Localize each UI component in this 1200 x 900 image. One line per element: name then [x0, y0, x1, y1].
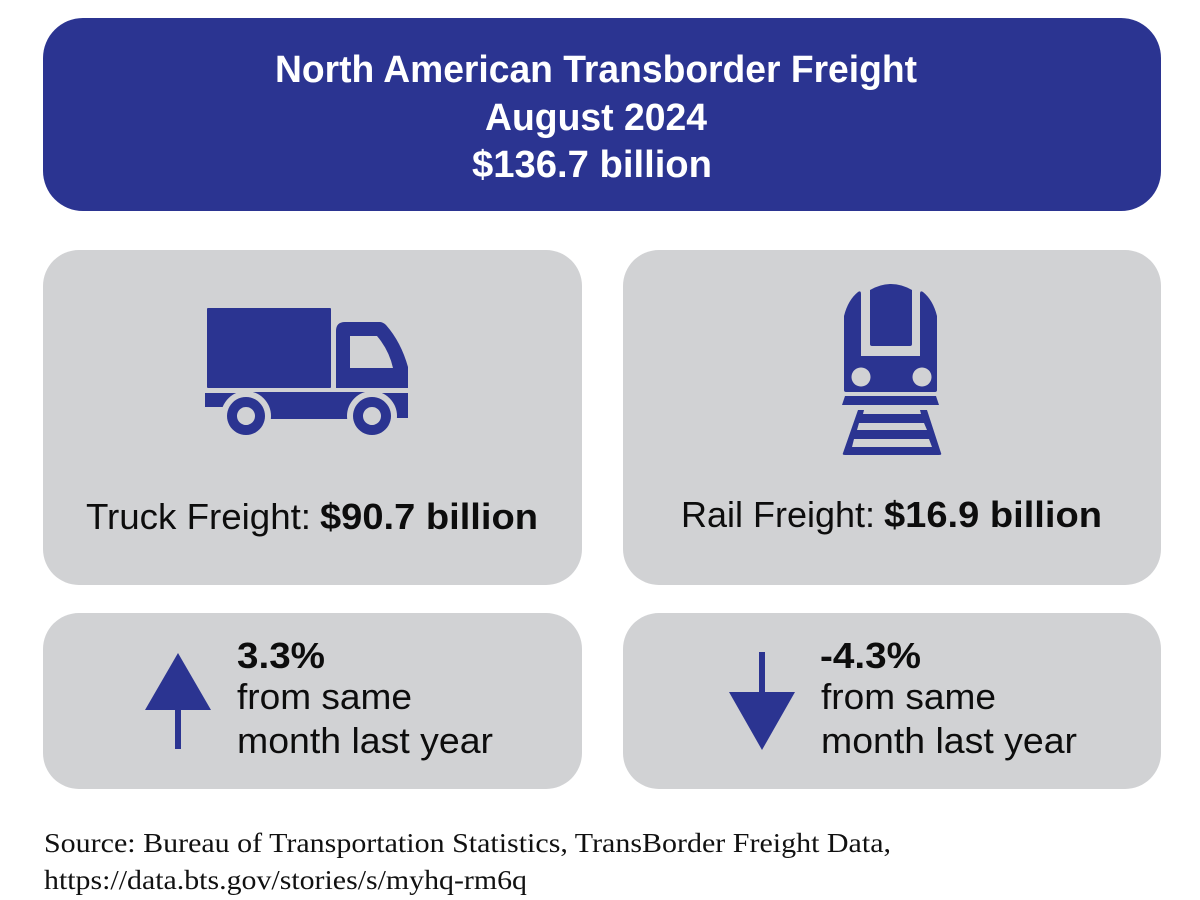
source note: https://data.bts.gov/stories/s/myhq-rm6q [44, 865, 528, 895]
title text [275, 49, 917, 186]
truck freight value: $90.7 billion [320, 496, 538, 537]
rail freight value [681, 494, 1102, 535]
title banner [43, 18, 1161, 211]
truck change text [237, 635, 493, 761]
title text: August 2024 [485, 97, 707, 139]
rail freight value: $16.9 billion [884, 494, 1102, 535]
truck change text: month last year [237, 720, 493, 761]
title text: North American Transborder Freight [275, 49, 917, 91]
panel: truck change [43, 613, 582, 789]
rail change text: month last year [821, 720, 1077, 761]
truck freight value [86, 496, 538, 537]
icon: train [842, 284, 941, 455]
rail freight value: Rail Freight: [681, 494, 875, 535]
panel: rail change [623, 613, 1161, 789]
icon: up arrow [145, 653, 211, 749]
icon: truck [205, 308, 408, 441]
panel: rail freight [623, 250, 1161, 585]
source note [44, 828, 891, 895]
truck change text: from same [237, 676, 412, 717]
icon: down arrow [729, 652, 795, 750]
rail change text [820, 635, 1077, 761]
truck change text: 3.3% [237, 635, 325, 676]
truck freight value: Truck Freight: [86, 496, 311, 537]
title text: $136.7 billion [472, 144, 712, 186]
source note: Source: Bureau of Transportation Statistics, TransBorder Freight Data, [44, 828, 891, 858]
rail change text: -4.3% [820, 635, 921, 676]
rail change text: from same [821, 676, 996, 717]
panel: truck freight [43, 250, 582, 585]
